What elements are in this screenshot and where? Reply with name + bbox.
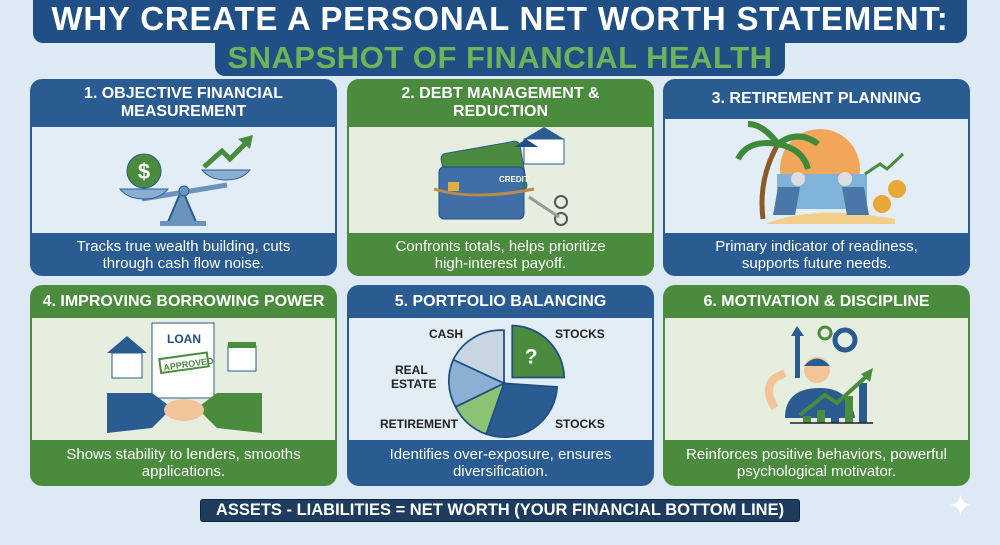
caption 1 <box>76 238 290 272</box>
icon: handshake loan <box>32 318 335 440</box>
panel: 5 portfolio <box>347 285 654 486</box>
heading 6: 6. MOTIVATION & DISCIPLINE <box>703 292 930 310</box>
caption 4: applications. <box>142 463 225 480</box>
panel: 4 borrowing power <box>30 285 337 486</box>
icon: credit cards: CREDIT <box>499 175 529 184</box>
caption 3 <box>715 238 918 272</box>
title: WHY CREATE A PERSONAL NET WORTH STATEMENT: <box>51 0 949 37</box>
caption 5 <box>390 446 611 480</box>
panel: 1 objective measurement <box>30 79 337 276</box>
caption 1: Tracks true wealth building, cuts <box>77 238 290 254</box>
chart: pie: STOCKS <box>555 327 605 341</box>
caption 2: Confronts totals, helps prioritize <box>395 238 606 254</box>
footer formula: ASSETS - LIABILITIES = NET WORTH (YOUR FINANCIAL BOTTOM LINE) <box>216 501 784 519</box>
panel: 6 motivation <box>663 285 970 486</box>
heading 3: 3. RETIREMENT PLANNING <box>712 90 921 107</box>
caption 5: diversification. <box>453 463 548 480</box>
heading 2: REDUCTION <box>453 103 548 120</box>
heading 2 <box>401 85 600 120</box>
caption 5: Identifies over-exposure, ensures <box>390 446 611 463</box>
caption 6: psychological motivator. <box>737 463 896 480</box>
chart: pie: ? <box>525 344 538 368</box>
caption 6 <box>686 446 947 480</box>
panel: 3 retirement <box>663 79 970 276</box>
icon: credit cards <box>349 127 652 233</box>
icon: handshake loan: LOAN <box>167 332 201 346</box>
icon: sparkle: ✦ <box>948 490 973 523</box>
caption 3: Primary indicator of readiness, <box>715 238 918 254</box>
caption 6: Reinforces positive behaviors, powerful <box>686 446 947 463</box>
caption 1: through cash flow noise. <box>103 254 264 272</box>
heading 1 <box>84 85 283 120</box>
subtitle: SNAPSHOT OF FINANCIAL HEALTH <box>227 40 772 75</box>
icon: scale <box>32 127 335 233</box>
icon: motivated person <box>665 318 968 440</box>
chart: pie <box>349 318 652 440</box>
chart: pie: RETIREMENT <box>380 417 459 431</box>
caption 2 <box>395 238 606 272</box>
icon: handshake loan: APPROVED <box>163 356 215 373</box>
caption 3: supports future needs. <box>742 254 891 272</box>
panel: 2 debt management <box>347 79 654 276</box>
caption 2: high-interest payoff. <box>435 254 566 272</box>
heading 4: 4. IMPROVING BORROWING POWER <box>43 292 324 310</box>
chart: pie: CASH <box>429 327 463 341</box>
chart: pie: STOCKS <box>555 417 605 431</box>
icon: beach <box>665 119 968 233</box>
icon: scale: $ <box>138 159 150 184</box>
chart: pie: ESTATE <box>391 377 437 391</box>
caption 4 <box>66 446 301 480</box>
caption 4: Shows stability to lenders, smooths <box>66 446 301 463</box>
chart: pie: REAL <box>395 363 428 377</box>
heading 5: 5. PORTFOLIO BALANCING <box>395 292 606 310</box>
heading 2: 2. DEBT MANAGEMENT & <box>401 85 600 102</box>
heading 1: MEASUREMENT <box>121 103 246 120</box>
heading 1: 1. OBJECTIVE FINANCIAL <box>84 85 283 102</box>
